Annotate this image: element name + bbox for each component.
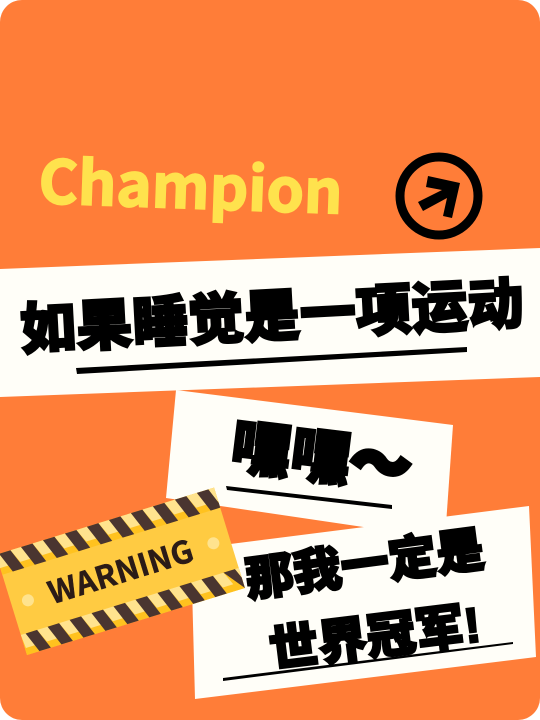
hehe text: 嘿嘿～: [227, 413, 414, 502]
text line one: 那我一定是: [243, 524, 487, 608]
top hazard stripe: [0, 488, 220, 577]
underline: [223, 642, 513, 681]
heading: Champion: Champion: [37, 134, 344, 232]
sign dots: [20, 536, 221, 608]
warning label: WARNING: [42, 526, 198, 613]
bottom hazard stripe: [21, 568, 245, 655]
warning sign: [0, 488, 245, 657]
panel: hehe note: [166, 390, 453, 539]
icon: circled arrow: [400, 157, 478, 235]
headline text: 如果睡觉是一项运动: [19, 272, 525, 361]
underline: [226, 486, 392, 509]
text line two: 世界冠军!: [266, 598, 484, 678]
panel: headline band: [0, 248, 540, 397]
underline: [76, 347, 467, 374]
panel: world champion note: [191, 506, 536, 699]
